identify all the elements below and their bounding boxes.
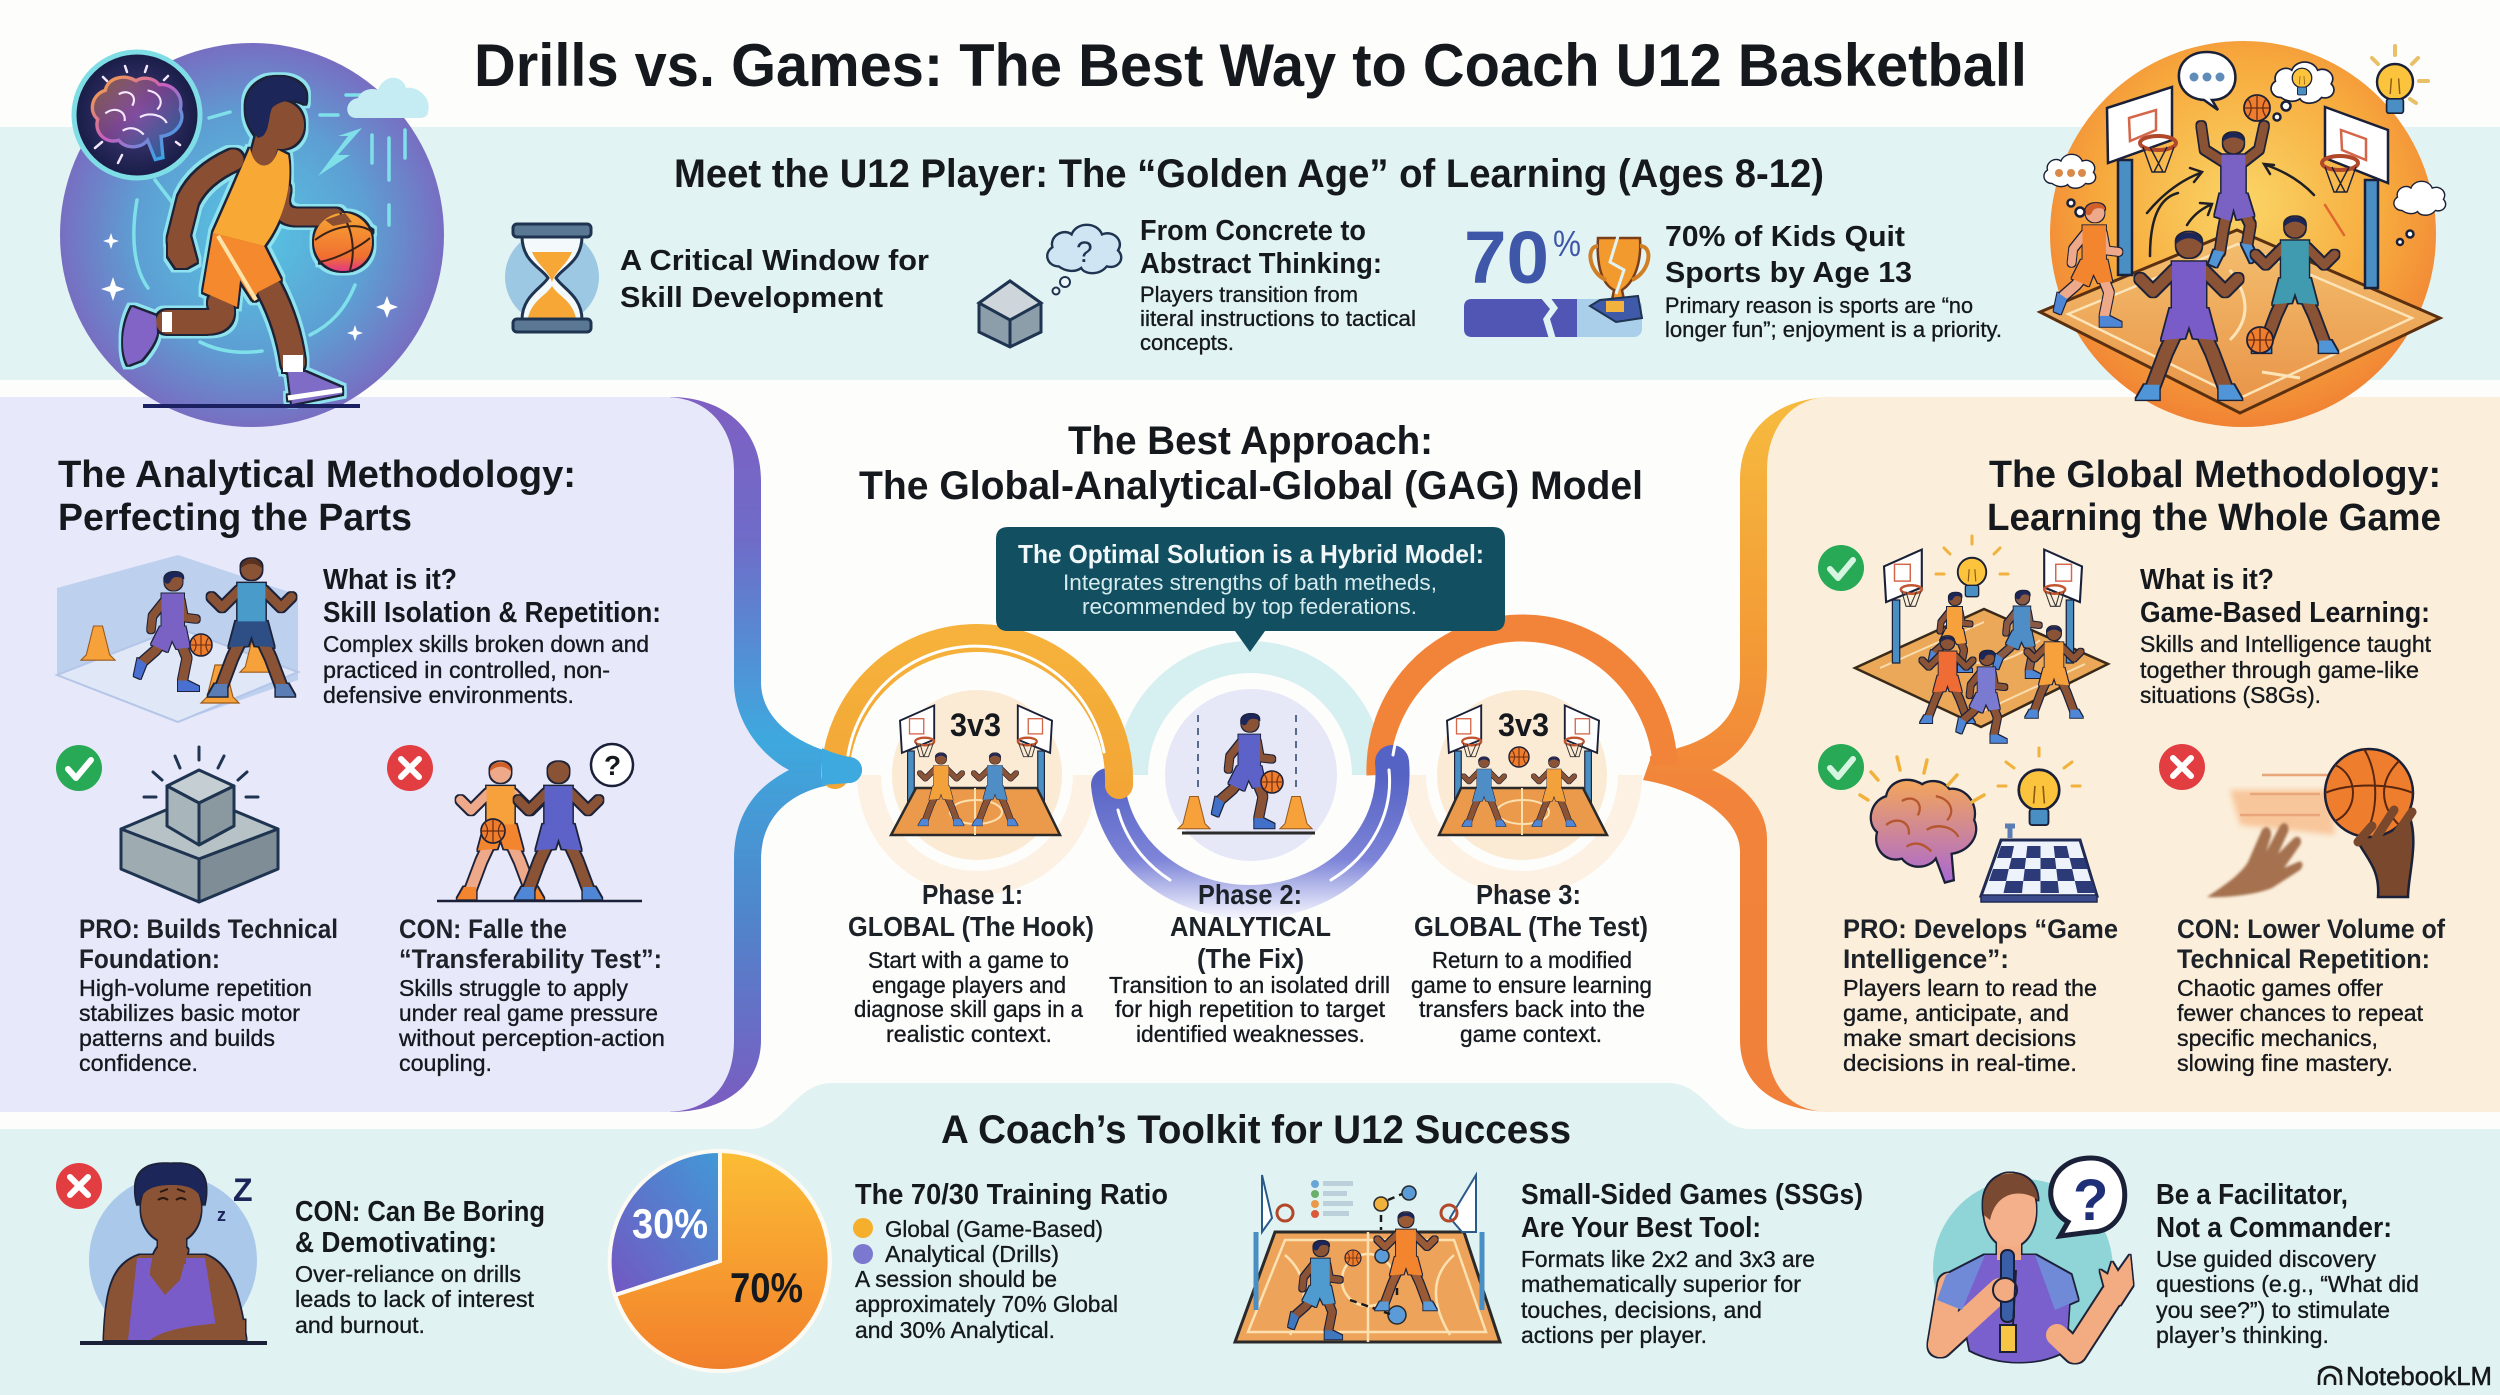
player figure — [123, 77, 372, 404]
training ratio text and legend: Global (Game-Based) — [885, 1216, 1103, 1242]
what is it text: defensive environments. — [323, 682, 574, 708]
what is it text: Complex skills broken down and — [323, 631, 649, 657]
training ratio text and legend — [853, 1179, 1168, 1343]
con text analytical — [398, 914, 665, 1076]
phase 3 text: transfers back into the — [1419, 996, 1645, 1022]
phase 3 text: Phase 3: — [1476, 879, 1581, 910]
con boring text: and burnout. — [295, 1312, 425, 1338]
con text analytical: Skills struggle to apply — [399, 975, 628, 1001]
phase 2 text: Transition to an isolated drill — [1109, 972, 1390, 998]
facilitator text: Not a Commander: — [2156, 1212, 2392, 1244]
phase 3 text: Return to a modified — [1432, 947, 1632, 973]
con text analytical: without perception-action — [398, 1025, 665, 1051]
phase 3 text — [1411, 879, 1652, 1047]
phase 1 text: Phase 1: — [922, 879, 1023, 910]
phase 3 illustration — [1437, 690, 1607, 860]
icon: cube and thought cloud: ? — [1076, 236, 1093, 269]
training ratio text and legend: approximately 70% Global — [855, 1291, 1118, 1317]
phase 3 illustration: 3v3 — [1498, 707, 1549, 743]
facilitator text: player’s thinking. — [2156, 1322, 2329, 1348]
best approach heading — [859, 419, 1643, 508]
left bracket ribbon — [670, 397, 862, 1112]
training ratio text and legend: and 30% Analytical. — [855, 1317, 1055, 1343]
pro text global: Intelligence”: — [1843, 944, 2009, 974]
illustration: ball and blurred hand — [2207, 749, 2413, 897]
global what is it text: What is it? — [2140, 564, 2274, 596]
icon: green check — [1818, 545, 1864, 591]
faint background rings — [869, 657, 1630, 883]
abstract thinking text: Abstract Thinking: — [1140, 248, 1382, 280]
pro text analytical: confidence. — [79, 1050, 198, 1076]
phase 1 illustration: 3v3 — [950, 707, 1001, 743]
abstract thinking text — [1140, 215, 1416, 355]
what is it text: What is it? — [323, 564, 457, 596]
con boring text: CON: Can Be Boring — [295, 1196, 545, 1228]
illustration: bored player — [80, 1164, 267, 1345]
NotebookLM logo: NotebookLM — [2346, 1361, 2492, 1391]
small sided games text: Formats like 2x2 and 3x3 are — [1521, 1246, 1815, 1272]
right bracket ribbon — [1643, 397, 1835, 1112]
global what is it text: Skills and Intelligence taught — [2140, 631, 2432, 657]
critical window text — [620, 245, 929, 314]
con boring text: leads to lack of interest — [295, 1286, 535, 1312]
icon: green check — [56, 745, 102, 791]
con text global: specific mechanics, — [2177, 1025, 2378, 1051]
illustration: offense vs defense players — [437, 744, 642, 901]
phase 1 text: Start with a game to — [868, 947, 1069, 973]
phase 1 text: diagnose skill gaps in a — [854, 996, 1083, 1022]
abstract thinking text: concepts. — [1140, 330, 1234, 355]
small sided games text: actions per player. — [1521, 1322, 1707, 1348]
ground line — [143, 404, 360, 408]
phase 2 text — [1109, 879, 1390, 1047]
pro text global: make smart decisions — [1843, 1025, 2076, 1051]
facilitator text: questions (e.g., “What did — [2156, 1271, 2419, 1297]
facilitator text: you see?”) to stimulate — [2156, 1297, 2390, 1323]
phase 2 text: (The Fix) — [1197, 943, 1304, 974]
70 percent stat with broken bar and trophy — [1464, 216, 1648, 339]
icon: red cross — [2159, 744, 2205, 790]
quit sports text: Sports by Age 13 — [1665, 257, 1912, 289]
global what is it text: together through game-like — [2140, 657, 2419, 683]
phase 3 text: game to ensure learning — [1411, 972, 1652, 998]
illustration: coach with microphone — [1933, 1158, 2133, 1362]
small sided games text: mathematically superior for — [1521, 1271, 1801, 1297]
what is it text — [323, 564, 661, 708]
meet the player heading: Meet the U12 Player: The “Golden Age” of Learning (Ages 8-12) — [674, 152, 1824, 196]
hoops — [2107, 87, 2388, 288]
phase 1 text: realistic context. — [886, 1021, 1052, 1047]
icon: red cross — [56, 1163, 102, 1209]
con text global: fewer chances to repeat — [2177, 1000, 2424, 1026]
pro text analytical: High-volume repetition — [79, 975, 312, 1001]
phase 1 text — [848, 879, 1094, 1047]
yellow arc — [835, 638, 1119, 785]
icon: cube and thought cloud — [979, 225, 1121, 347]
passing arrows — [2147, 164, 2344, 256]
callout: hybrid model: The Optimal Solution is a Hybrid Model: — [1018, 539, 1484, 569]
con text analytical: under real game pressure — [399, 1000, 658, 1026]
top teal band — [0, 127, 2500, 380]
global what is it text — [2140, 564, 2432, 708]
facilitator text: Use guided discovery — [2156, 1246, 2376, 1272]
best approach heading: The Best Approach: — [1068, 419, 1433, 463]
analytical heading: Perfecting the Parts — [58, 497, 412, 539]
con text global: slowing fine mastery. — [2177, 1050, 2393, 1076]
quit sports text: longer fun”; enjoyment is a priority. — [1665, 317, 2002, 342]
phase 1 text: GLOBAL (The Hook) — [848, 911, 1094, 942]
global what is it text: situations (S8Gs). — [2140, 682, 2321, 708]
phase 2 text: identified weaknesses. — [1136, 1021, 1365, 1047]
speech and thought bubbles — [2044, 52, 2446, 245]
quit sports text: Primary reason is sports are “no — [1665, 293, 1973, 318]
training ratio text and legend: The 70/30 Training Ratio — [855, 1179, 1168, 1211]
quit sports text: 70% of Kids Quit — [1665, 221, 1905, 253]
analytical heading: The Analytical Methodology: — [58, 454, 576, 496]
pro text global: Players learn to read the — [1843, 975, 2097, 1001]
panel: global methodology — [1643, 397, 2500, 1112]
abstract thinking text: From Concrete to — [1140, 215, 1366, 247]
training ratio text and legend: Analytical (Drills) — [885, 1241, 1059, 1267]
small sided games text: Are Your Best Tool: — [1521, 1212, 1761, 1244]
abstract thinking text: Players transition from — [1140, 282, 1358, 307]
pro text analytical — [79, 914, 338, 1076]
players — [2201, 126, 2264, 267]
abstract thinking text: iiteral instructions to tactical — [1140, 306, 1416, 331]
con boring text — [295, 1196, 545, 1338]
callout: hybrid model: recommended by top federations. — [1082, 594, 1417, 619]
global heading — [1987, 454, 2441, 539]
icon: green check — [1818, 744, 1864, 790]
brain badge — [74, 52, 200, 178]
phase 1 illustration — [891, 690, 1062, 860]
cloud — [347, 78, 429, 118]
best approach heading: The Global-Analytical-Global (GAG) Model — [859, 464, 1643, 508]
critical window text: Skill Development — [620, 282, 883, 314]
phase 2 text: for high repetition to target — [1115, 996, 1386, 1022]
drill illustration — [57, 555, 298, 722]
icon: stone blocks foundation — [121, 747, 278, 902]
con text analytical: “Transferability Test”: — [399, 944, 662, 974]
phase 1 text: engage players and — [872, 972, 1066, 998]
pro text analytical: PRO: Builds Technical — [79, 914, 338, 944]
70 percent stat with broken bar and trophy: 70 — [1464, 216, 1549, 299]
illustration: bored player: Z — [233, 1172, 253, 1208]
phase 3 text: GLOBAL (The Test) — [1414, 911, 1648, 942]
light bulb — [2372, 46, 2428, 113]
title: Drills vs. Games: The Best Way to Coach U12 Basketball — [474, 32, 2027, 99]
GAG model diagram — [822, 527, 1664, 1047]
illustration: small-sided game court — [1235, 1175, 1500, 1342]
pie chart 70/30 — [608, 1149, 832, 1373]
pro text global: game, anticipate, and — [1843, 1000, 2069, 1026]
callout: hybrid model: Integrates strengths of bath metheds, — [1063, 570, 1437, 595]
illustration: offense vs defense players: ? — [604, 750, 621, 781]
global heading: The Global Methodology: — [1989, 454, 2441, 496]
phase 2 text: ANALYTICAL — [1170, 911, 1331, 942]
training ratio text and legend: A session should be — [855, 1266, 1057, 1292]
facilitator text: Be a Facilitator, — [2156, 1179, 2348, 1211]
global what is it text: Game-Based Learning: — [2140, 597, 2430, 629]
con text analytical: CON: Falle the — [399, 914, 567, 944]
icon: hourglass — [505, 224, 599, 332]
illustration: brain, bulb and chessboard — [1860, 748, 2097, 902]
pro text global: PRO: Develops “Game — [1843, 914, 2118, 944]
what is it text: practiced in controlled, non- — [323, 657, 610, 683]
ribbon highlights — [848, 645, 1650, 880]
critical window text: A Critical Window for — [620, 245, 929, 277]
con text global: CON: Lower Volume of — [2177, 914, 2446, 944]
pie chart 70/30: 30% — [632, 1200, 708, 1247]
phase 3 text: game context. — [1460, 1021, 1602, 1047]
con text analytical: coupling. — [399, 1050, 492, 1076]
pro text analytical: patterns and builds — [79, 1025, 275, 1051]
panel background — [1712, 397, 2500, 1112]
icon: red cross — [387, 745, 433, 791]
illustration: game court — [1855, 536, 2108, 743]
70 percent stat with broken bar and trophy: % — [1553, 223, 1581, 264]
panel: analytical methodology — [0, 397, 862, 1112]
global heading: Learning the Whole Game — [1987, 497, 2441, 539]
left connector tip over yellow arc — [822, 748, 862, 785]
con boring text: & Demotivating: — [295, 1227, 497, 1259]
con text global: Chaotic games offer — [2177, 975, 2383, 1001]
callout: hybrid model — [996, 527, 1505, 652]
illustration: coach with microphone: ? — [2073, 1168, 2108, 1233]
illustration: small-sided game circle — [2040, 41, 2446, 427]
phase 2 text: Phase 2: — [1198, 879, 1302, 910]
con text global: Technical Repetition: — [2177, 944, 2430, 974]
panel background — [0, 397, 789, 1112]
con text global — [2177, 914, 2446, 1076]
pro text global — [1843, 914, 2118, 1076]
pro text analytical: Foundation: — [79, 944, 220, 974]
small sided games text — [1521, 1179, 1863, 1348]
pie chart 70/30: 70% — [730, 1264, 803, 1311]
quit sports text — [1665, 221, 2002, 342]
orange arc — [1380, 628, 1664, 775]
illustration: bored player: z — [217, 1205, 226, 1225]
illustration: dribbling player circle — [60, 43, 444, 427]
small sided games text: touches, decisions, and — [1521, 1297, 1762, 1323]
court — [2040, 230, 2440, 413]
facilitator text — [2156, 1179, 2419, 1348]
small sided games text: Small-Sided Games (SSGs) — [1521, 1179, 1863, 1211]
pro text analytical: stabilizes basic motor — [79, 1000, 300, 1026]
purple arc — [1108, 762, 1393, 902]
what is it text: Skill Isolation & Repetition: — [323, 597, 661, 629]
analytical heading — [58, 454, 576, 539]
toolkit heading: A Coach’s Toolkit for U12 Success — [941, 1108, 1571, 1152]
decorative motion lines and sparkles — [134, 95, 405, 352]
phase 2 illustration — [1165, 689, 1337, 861]
bottom toolkit band — [0, 1083, 2500, 1395]
con boring text: Over-reliance on drills — [295, 1261, 521, 1287]
pro text global: decisions in real-time. — [1843, 1050, 2077, 1076]
